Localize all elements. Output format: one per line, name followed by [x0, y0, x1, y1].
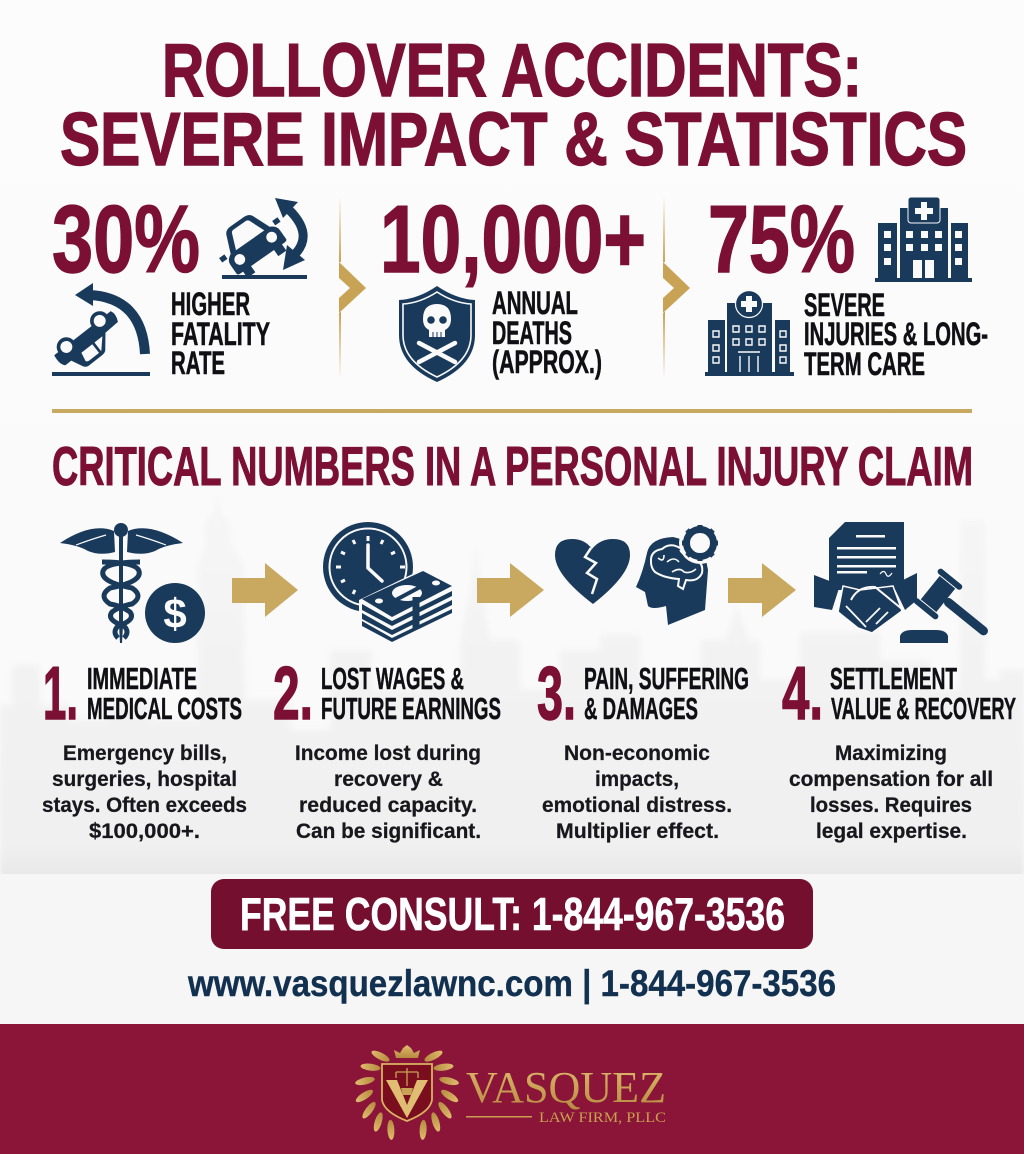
- step 4: 4.: [782, 651, 823, 735]
- label: [171, 286, 270, 381]
- step 4: [782, 651, 1016, 843]
- label: [804, 287, 988, 382]
- label: [492, 285, 602, 380]
- logo wordmark: LAW FIRM, PLLC: [539, 1110, 666, 1126]
- step 2: Can be significant.: [296, 819, 481, 843]
- step 4: compensation for all: [789, 767, 993, 791]
- icon: head with brain and gear: [636, 522, 721, 625]
- step 2: [273, 651, 501, 843]
- divider line: [52, 409, 972, 413]
- step 4: Maximizing: [835, 741, 947, 765]
- call to action button: FREE CONSULT: 1-844-967-3536: [240, 888, 785, 940]
- step 1: Emergency bills,: [63, 741, 227, 765]
- step 3: Non-economic: [564, 741, 710, 765]
- arrow 3: [728, 563, 796, 617]
- stat: 75% severe injuries: [705, 186, 988, 382]
- logo wordmark: VASQUEZ: [466, 1063, 666, 1112]
- label: SEVERE: [804, 287, 885, 323]
- background city skyline: [0, 488, 1024, 880]
- step 3: 3.: [537, 651, 576, 735]
- stat: 30% higher fatality rate: [50, 186, 307, 381]
- icon: caduceus with dollar coin: $: [163, 590, 187, 637]
- arrow 1: [232, 563, 298, 617]
- logo crest: [354, 1045, 460, 1140]
- title: [60, 28, 967, 181]
- step 1: [42, 651, 247, 843]
- step 3: Multiplier effect.: [556, 819, 719, 843]
- step 4: legal expertise.: [816, 819, 967, 843]
- step 1: $100,000+.: [89, 819, 200, 843]
- step 1: MEDICAL COSTS: [87, 692, 242, 726]
- label: TERM CARE: [804, 346, 925, 382]
- step 1: IMMEDIATE: [87, 662, 197, 696]
- icon: shield with skull and crossbones: [399, 286, 475, 382]
- step 1: surgeries, hospital: [52, 767, 237, 791]
- step 4: losses. Requires: [810, 793, 972, 817]
- stat: 10,000+ annual deaths: [380, 186, 646, 382]
- logo: Vasquez Law Firm: [354, 1045, 666, 1140]
- icon: broken heart: [555, 539, 630, 604]
- step 3: emotional distress.: [542, 793, 732, 817]
- step 2: 2.: [273, 651, 313, 735]
- step 2: LOST WAGES &: [321, 662, 464, 696]
- icon: hospital small: [705, 290, 794, 376]
- step 3: PAIN, SUFFERING: [584, 662, 749, 696]
- water band: [0, 874, 1024, 1024]
- icon: tilting car with rotation arrows: [208, 198, 307, 285]
- step 2: reduced capacity.: [299, 793, 477, 817]
- stat: 10,000+ annual deaths: 10,000+: [380, 186, 646, 293]
- stat: 75% severe injuries: 75%: [708, 186, 855, 293]
- footer band: [0, 1024, 1024, 1154]
- website and phone: www.vasquezlawnc.com | 1-844-967-3536: [187, 963, 836, 1005]
- label: FATALITY: [171, 316, 270, 352]
- step 3: & DAMAGES: [584, 692, 698, 726]
- call to action button: [211, 879, 813, 949]
- icon: clock and money stack: [323, 522, 455, 644]
- icon: hospital large: [875, 197, 972, 282]
- step 1: stays. Often exceeds: [42, 793, 247, 817]
- divider chevron 2: [663, 197, 690, 378]
- divider chevron 1: [339, 197, 366, 378]
- label: RATE: [171, 345, 225, 381]
- step 3: [537, 651, 749, 843]
- step 2: Income lost during: [295, 741, 481, 765]
- label: (APPROX.): [492, 344, 602, 380]
- icon: document, handshake and gavel: [814, 522, 1001, 651]
- step 2: FUTURE EARNINGS: [321, 692, 501, 726]
- step 2: recovery &: [334, 767, 443, 791]
- icon: caduceus with dollar coin: [60, 523, 205, 643]
- label: DEATHS: [492, 315, 572, 351]
- label: HIGHER: [171, 286, 250, 322]
- arrow 2: [477, 563, 544, 617]
- stat: 30% higher fatality rate: 30%: [52, 186, 200, 293]
- icon: overturned car with arc arrow: [50, 283, 150, 379]
- label: ANNUAL: [492, 285, 578, 321]
- step 3: impacts,: [595, 767, 679, 791]
- step 1: 1.: [43, 651, 78, 735]
